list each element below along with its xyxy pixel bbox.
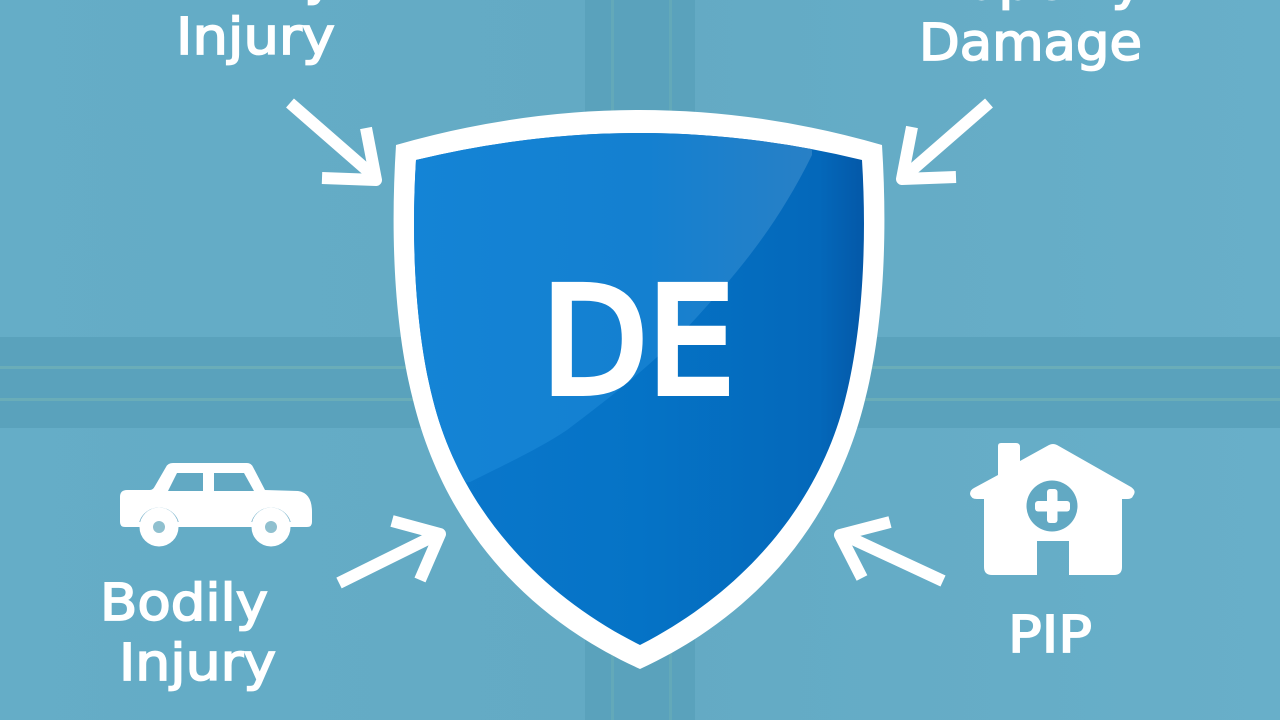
icon: house with medical cross [970, 443, 1135, 575]
road band: vertical [585, 0, 695, 720]
label: bottom-left bodily injury: Injury [119, 634, 276, 693]
arrow: top-right [902, 103, 989, 179]
icon: car [120, 463, 312, 546]
label: bottom-left bodily injury [100, 574, 276, 693]
shield letters: DE [542, 256, 734, 428]
car wheel: right [252, 508, 290, 546]
shield blue face [414, 133, 864, 645]
label: top-left bodily injury: Injury [176, 8, 335, 67]
label: PIP: PIP [1008, 606, 1092, 665]
shield gloss highlight [414, 133, 812, 482]
car wheel: left [140, 508, 178, 546]
label: bottom-left bodily injury: Bodily [100, 574, 268, 633]
shield [394, 100, 884, 669]
medical badge [1026, 480, 1078, 532]
shield white border [394, 110, 884, 669]
arrow: bottom-right [840, 522, 943, 581]
arrow: top-left [290, 103, 376, 180]
arrow: bottom-left [339, 521, 440, 583]
label: top-right property damage: Damage [919, 14, 1142, 73]
road band: horizontal [0, 337, 1280, 428]
